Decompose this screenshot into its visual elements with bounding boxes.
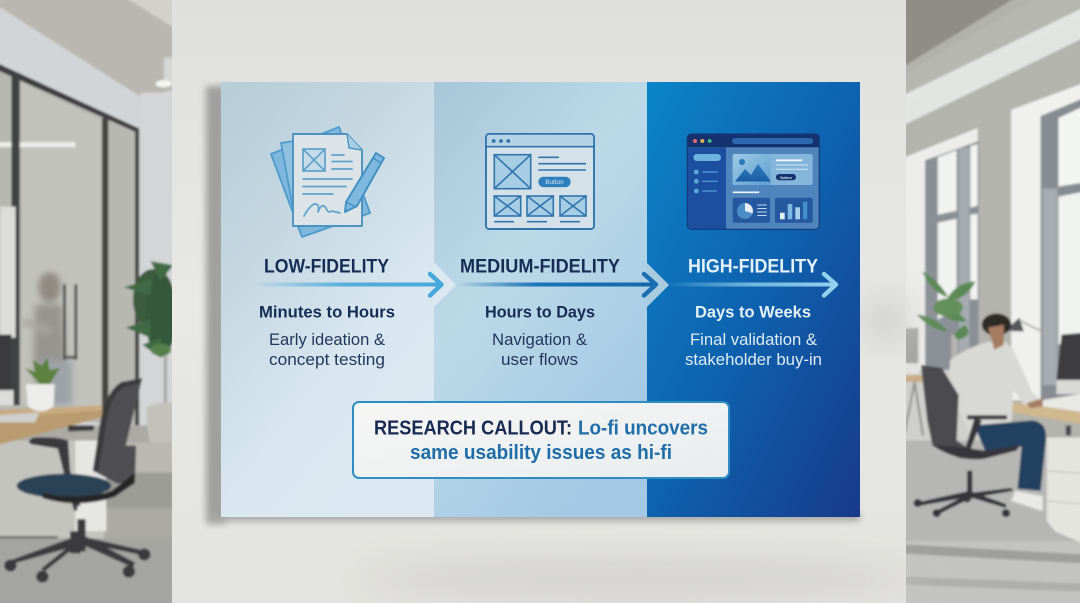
desk plant [25, 358, 60, 384]
back desk monitor [906, 327, 920, 364]
text block: medium-fidelity details [485, 302, 595, 369]
icon: high-fidelity UI [687, 134, 819, 229]
office chair [4, 378, 150, 583]
callout: research finding: same usability issues as hi-fi [410, 442, 672, 464]
column: low-fidelity background [221, 82, 434, 517]
floor [16, 424, 172, 540]
plain wall [172, 0, 920, 603]
desk lamp [1005, 318, 1024, 332]
seated person's chair [914, 365, 1020, 517]
seated person [948, 314, 1046, 511]
heading: medium-fidelity: MEDIUM-FIDELITY [460, 256, 620, 278]
column: medium-fidelity background [434, 82, 647, 517]
left office background [0, 0, 176, 603]
pendant lamp [164, 57, 173, 82]
text block: medium-fidelity details: Hours to Days [485, 302, 595, 322]
text block: medium-fidelity details: Navigation & [492, 331, 587, 349]
floor [906, 440, 982, 444]
chevron notch: medium to high [647, 263, 669, 307]
text block: medium-fidelity details: user flows [501, 351, 578, 369]
white cabinet [0, 441, 104, 538]
icon: wireframe window: Button [545, 179, 564, 186]
panel drop shadow [206, 86, 860, 524]
text block: high-fidelity details: Days to Weeks [695, 302, 811, 322]
icon: high-fidelity UI: Button [780, 176, 792, 180]
heading: high-fidelity: HIGH-FIDELITY [688, 256, 818, 278]
icon: wireframe window [486, 134, 594, 229]
chevron notch: low to medium [434, 262, 456, 307]
main monitor [1056, 333, 1080, 380]
text block: high-fidelity details: stakeholder buy-in [685, 351, 822, 369]
callout: research finding: RESEARCH CALLOUT: [374, 418, 572, 440]
callout: research finding: Lo-fi uncovers [578, 418, 708, 440]
infographic panel [221, 82, 860, 517]
plant [916, 270, 976, 359]
text block: low-fidelity details: concept testing [269, 351, 385, 369]
callout: research finding [353, 402, 729, 478]
icon: paper sketches and pen [271, 127, 384, 237]
text block: high-fidelity details: Final validation & [690, 331, 817, 349]
monitor and desk [0, 335, 11, 393]
person behind glass [23, 272, 72, 405]
right office background [902, 0, 1080, 603]
text block: low-fidelity details: Early ideation & [269, 331, 385, 349]
window 2 [1011, 83, 1080, 400]
arrow: high-fidelity [668, 274, 836, 296]
heading: low-fidelity: LOW-FIDELITY [264, 256, 389, 278]
arrow: medium-fidelity [456, 274, 656, 296]
desk and cabinet [1041, 392, 1080, 413]
text block: low-fidelity details: Minutes to Hours [259, 302, 395, 322]
large plant [124, 261, 176, 443]
text block: low-fidelity details [259, 302, 395, 369]
text block: high-fidelity details [685, 302, 822, 369]
column: high-fidelity background [647, 82, 860, 517]
arrow: low-fidelity [252, 274, 442, 296]
window 1 [906, 128, 979, 371]
